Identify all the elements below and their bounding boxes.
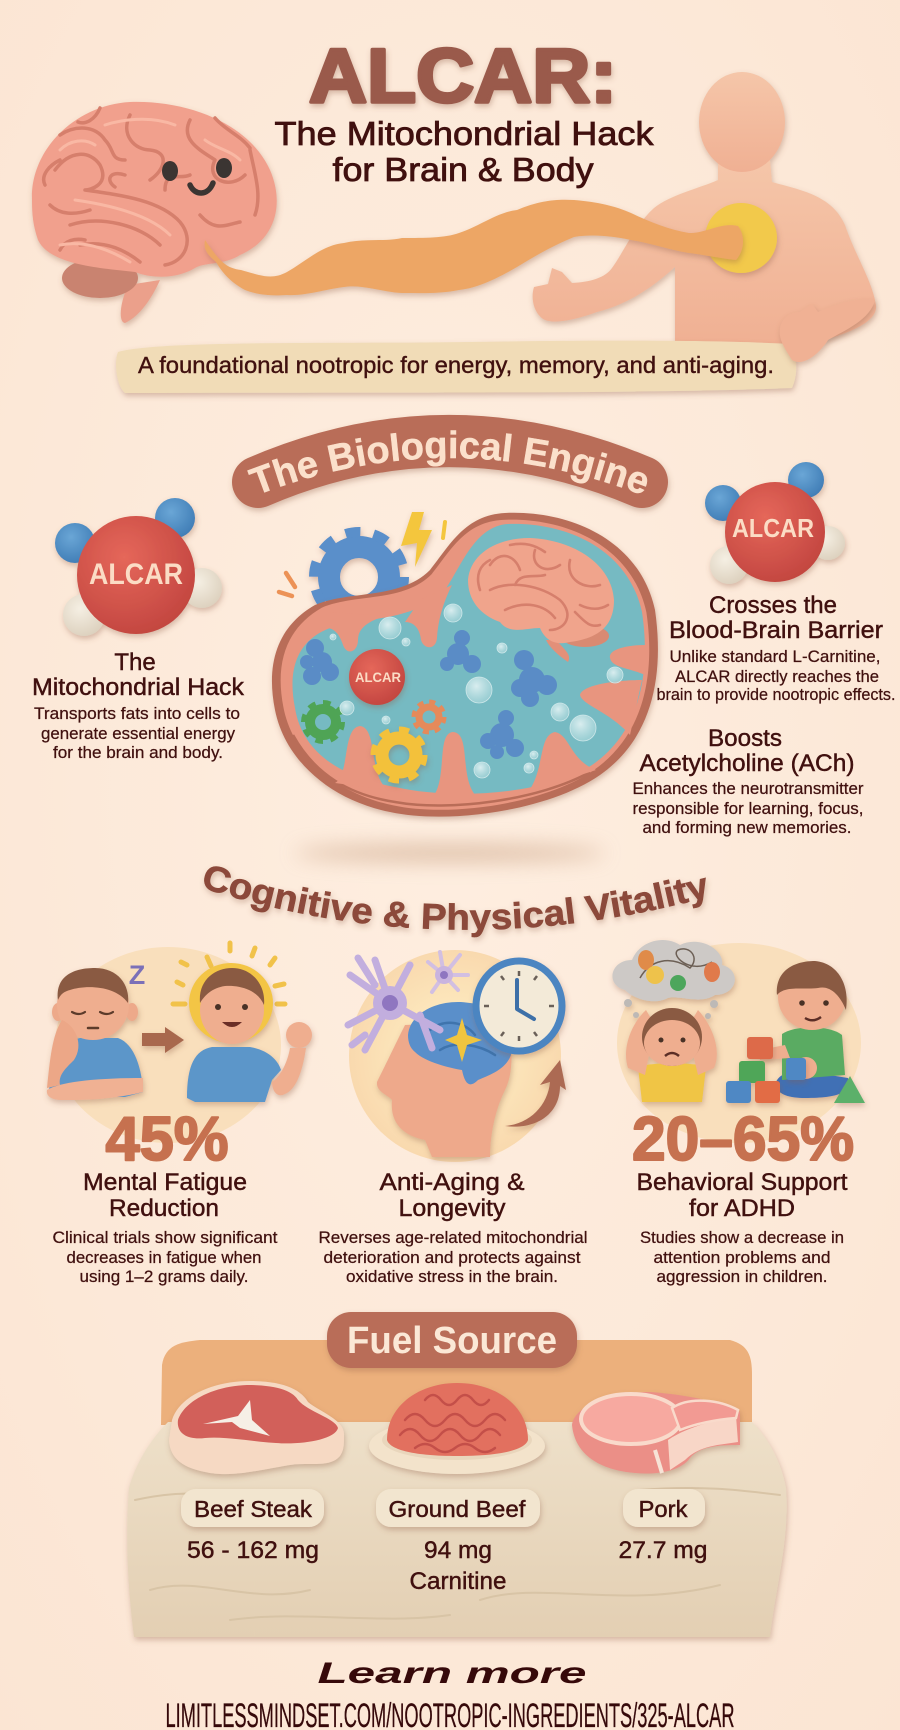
text: The Mitochondrial Hack: generate essential energy — [41, 724, 235, 743]
matrix — [292, 524, 645, 794]
icon: blue gear — [314, 532, 404, 622]
orange gear — [414, 702, 444, 732]
text: behavioral support: Behavioral Support — [636, 1169, 848, 1196]
label pills: Ground Beef — [388, 1496, 526, 1522]
brain with smiling face — [32, 102, 277, 323]
backdrop glow — [349, 950, 561, 1162]
playing child — [760, 961, 849, 1098]
text: mental fatigue reduction: Mental Fatigue — [83, 1169, 247, 1196]
eyes — [162, 161, 178, 181]
text: mental fatigue reduction: using 1–2 grams daily. — [80, 1267, 248, 1286]
molecule: right ALCAR — [705, 462, 845, 584]
pill: Fuel Source — [327, 1312, 577, 1368]
head silhouette — [377, 1020, 511, 1157]
label pills: Beef Steak — [194, 1496, 313, 1522]
panel: mental fatigue — [47, 943, 312, 1286]
brain stem — [121, 280, 160, 323]
brain inside mitochondrion — [468, 538, 614, 662]
upward arrow — [505, 1060, 566, 1127]
green gear — [304, 703, 342, 741]
text: The Mitochondrial Hack: for the brain and body. — [53, 743, 223, 762]
diagram: mitochondrion — [272, 513, 658, 817]
carnitine amounts — [187, 1537, 708, 1595]
human right hand — [780, 300, 875, 362]
human figure torso and head — [533, 72, 876, 345]
panel: fuel source display — [127, 1312, 787, 1637]
text: Boosts Acetylcholine: Boosts — [708, 725, 782, 752]
clay base — [127, 1422, 787, 1637]
cerebellum — [62, 258, 138, 298]
carnitine amounts: 94 mg — [424, 1537, 492, 1564]
text: behavioral support: for ADHD — [689, 1195, 795, 1222]
text: anti-aging and longevity — [318, 1169, 588, 1286]
neuron small — [428, 952, 468, 992]
text: The Mitochondrial Hack: The — [114, 649, 156, 676]
text: anti-aging and longevity: deterioration and protects against — [324, 1248, 581, 1267]
text: anti-aging and longevity: oxidative stress in the brain. — [346, 1267, 558, 1286]
text: Boosts Acetylcholine: Enhances the neurotransmitter — [632, 779, 864, 798]
blue brain — [408, 1002, 512, 1084]
text: behavioral support: attention problems and — [654, 1248, 830, 1267]
backdrop circle — [55, 947, 281, 1143]
subtitle — [274, 115, 654, 188]
section heading: Cognitive & Physical Vitality: Cognitive & Physical Vitality — [202, 866, 709, 943]
pork chop — [572, 1392, 740, 1474]
cristae folds — [322, 585, 645, 798]
title: ALCAR: ALCAR: — [309, 34, 617, 119]
text: behavioral support: aggression in children. — [656, 1267, 828, 1286]
arrow — [142, 1027, 184, 1053]
tired child — [47, 968, 143, 1100]
text: anti-aging and longevity: Anti-Aging & — [380, 1169, 524, 1196]
orange back wall — [161, 1340, 752, 1425]
orange nerve connection — [205, 200, 743, 295]
icon: lightning bolt — [401, 512, 445, 567]
text: mental fatigue reduction — [52, 1169, 278, 1286]
subtitle: The Mitochondrial Hack — [274, 115, 654, 152]
text: Boosts Acetylcholine: Acetylcholine (ACh) — [640, 750, 854, 777]
yellow gear — [374, 730, 424, 780]
ground shadow — [295, 844, 605, 862]
ALCAR ball: ALCAR — [355, 669, 401, 685]
text: The Mitochondrial Hack — [32, 649, 245, 762]
thought cloud — [612, 940, 735, 1019]
text: Crosses the Blood-Brain Barrier: ALCAR directly reaches the — [675, 667, 879, 686]
carnitine amounts: Carnitine — [410, 1568, 506, 1595]
text: Boosts Acetylcholine — [632, 725, 864, 837]
molecule: left ALCAR: ALCAR — [89, 558, 183, 591]
energized child — [187, 963, 312, 1102]
double lower membrane line — [293, 735, 590, 805]
panel: anti-aging — [318, 950, 588, 1286]
call to action: Learn more: Learn more — [318, 1657, 586, 1690]
clock — [476, 961, 562, 1051]
text: anti-aging and longevity: Longevity — [398, 1195, 506, 1222]
ALCAR ball — [349, 649, 405, 705]
carnitine amounts: 56 - 162 mg — [187, 1537, 319, 1564]
text: Crosses the Blood-Brain Barrier: Blood-Brain Barrier — [669, 617, 883, 644]
outer membrane — [272, 513, 658, 817]
smile — [190, 183, 213, 193]
beef steak — [169, 1381, 344, 1474]
text: behavioral support: Studies show a decrease in — [640, 1228, 844, 1247]
Z letter: Z — [129, 960, 145, 990]
yellow energy disc — [705, 203, 777, 273]
bubbles — [330, 604, 623, 778]
inner membrane — [281, 520, 649, 810]
text: Crosses the Blood-Brain Barrier: Unlike standard L-Carnitine, — [670, 647, 880, 666]
text: Crosses the Blood-Brain Barrier — [656, 592, 896, 704]
carnitine amounts: 27.7 mg — [618, 1537, 708, 1564]
text: Boosts Acetylcholine: responsible for learning, focus, — [632, 799, 864, 818]
text: mental fatigue reduction: Clinical trials show significant — [52, 1228, 278, 1247]
text: The Mitochondrial Hack: Transports fats into cells to — [34, 704, 240, 723]
subtitle: for Brain & Body — [332, 151, 594, 188]
text: mental fatigue reduction: decreases in fatigue when — [66, 1248, 262, 1267]
text: behavioral support — [636, 1169, 848, 1286]
label pills — [181, 1489, 705, 1527]
stat 20-65%: 20–65% — [632, 1105, 854, 1174]
tagline band: A foundational nootropic for energy, memory, and anti-aging. — [138, 352, 774, 378]
text: Crosses the Blood-Brain Barrier: Crosses the — [709, 592, 837, 619]
text: mental fatigue reduction: Reduction — [109, 1195, 219, 1222]
ground beef on plate — [369, 1383, 545, 1474]
text: anti-aging and longevity: Reverses age-related mitochondrial — [318, 1228, 588, 1247]
distressed child — [626, 1008, 717, 1102]
cerebrum — [32, 102, 277, 277]
tagline band — [116, 341, 796, 393]
sun rays — [173, 943, 285, 1004]
blue protein clusters — [300, 630, 557, 759]
label pills: Pork — [638, 1496, 688, 1522]
stat 45%: 45% — [106, 1105, 228, 1174]
spark — [445, 1018, 482, 1062]
section banner: The Biological Engine: The Biological Engine — [247, 430, 648, 494]
spark dashes — [279, 573, 295, 596]
molecule: left ALCAR — [55, 498, 222, 636]
text: The Mitochondrial Hack: Mitochondrial Hack — [32, 674, 245, 701]
backdrop circle — [617, 943, 861, 1143]
molecule: right ALCAR: ALCAR — [732, 513, 814, 543]
text: Boosts Acetylcholine: and forming new memories. — [642, 818, 852, 837]
toy blocks — [726, 1037, 865, 1103]
neuron large — [348, 958, 440, 1050]
pill: Fuel Source: Fuel Source — [347, 1320, 557, 1362]
panel: ADHD — [612, 940, 865, 1286]
